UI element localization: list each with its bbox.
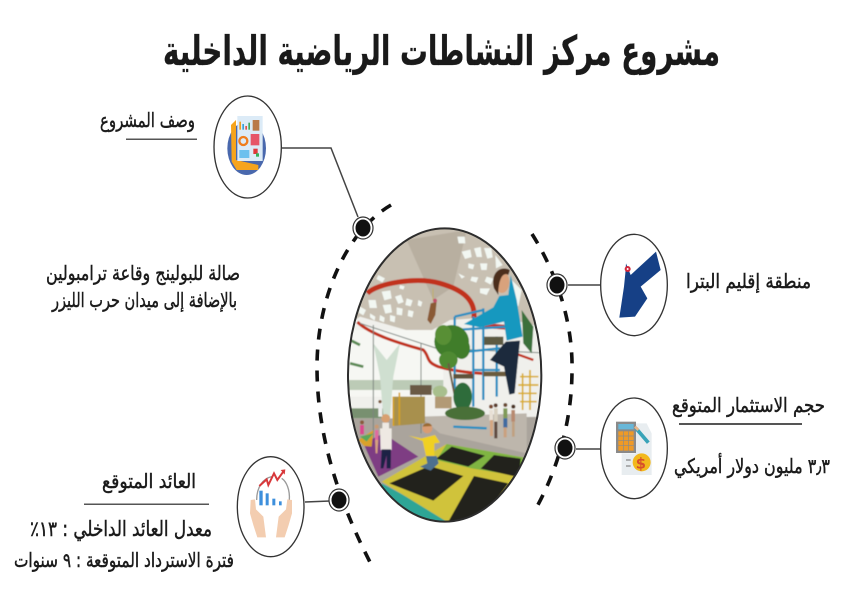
purple mat xyxy=(363,433,418,477)
trampoline beds xyxy=(389,447,521,522)
red ribbon 2 xyxy=(357,322,497,374)
group of people right xyxy=(489,403,515,438)
underline: expected return xyxy=(84,504,209,505)
small kids xyxy=(360,425,364,434)
text: description line 1: صالة للبولينج وقاعة ترامبولين xyxy=(46,261,240,285)
rope climber xyxy=(432,288,434,300)
heading: location: منطقة إقليم البترا xyxy=(686,269,811,294)
man in white xyxy=(380,428,392,450)
connector: investment xyxy=(576,448,601,450)
icon: calculator and coin xyxy=(601,398,667,499)
photo: indoor activity hall xyxy=(347,227,542,523)
icon: hands with rising chart xyxy=(237,457,304,557)
heading: expected return: العائد المتوقع xyxy=(102,469,196,493)
node: investment xyxy=(555,437,575,459)
node: project description xyxy=(353,217,373,239)
icon: report documents xyxy=(214,96,281,198)
text: internal rate of return: معدل العائد الداخلي : ١٣٪ xyxy=(30,517,212,541)
ceiling xyxy=(356,229,534,330)
connector: return xyxy=(305,501,330,502)
glass railing xyxy=(359,322,540,439)
heading: project description: وصف المشروع xyxy=(100,108,195,132)
atrium tree column xyxy=(373,343,400,417)
dashed arc: left xyxy=(317,205,391,568)
dashed arc: right xyxy=(532,234,572,512)
underline: project description xyxy=(126,138,197,140)
floor xyxy=(353,416,536,494)
connector: project description xyxy=(282,148,358,217)
icon: Jordan map xyxy=(601,234,667,336)
text: payback period: فترة الاسترداد المتوقعة : ٩ سنوات xyxy=(14,548,234,572)
connector: location xyxy=(568,284,601,286)
wooden cube xyxy=(393,397,425,426)
left palm xyxy=(350,340,363,367)
red ribbon 1 xyxy=(367,281,506,327)
node: location xyxy=(547,274,567,296)
teal base xyxy=(381,483,446,521)
boy in yellow xyxy=(408,435,440,456)
yellow stairs right xyxy=(518,370,538,410)
ceiling lattice xyxy=(359,237,522,322)
text: description line 2: بالإضافة إلى ميدان حرب الليزر xyxy=(51,288,237,313)
text: investment value: ٣٫٣ مليون دولار أمريكي xyxy=(674,453,830,479)
trampoline frame xyxy=(382,444,523,522)
photo outline xyxy=(348,228,541,522)
far windows xyxy=(406,330,432,336)
jumping woman xyxy=(464,275,523,341)
icon: calculator and coin: $ xyxy=(636,455,646,472)
underline: expected investment xyxy=(679,423,802,425)
central tree xyxy=(434,325,470,369)
blue climbing frame xyxy=(453,308,507,428)
node: return xyxy=(329,489,349,511)
